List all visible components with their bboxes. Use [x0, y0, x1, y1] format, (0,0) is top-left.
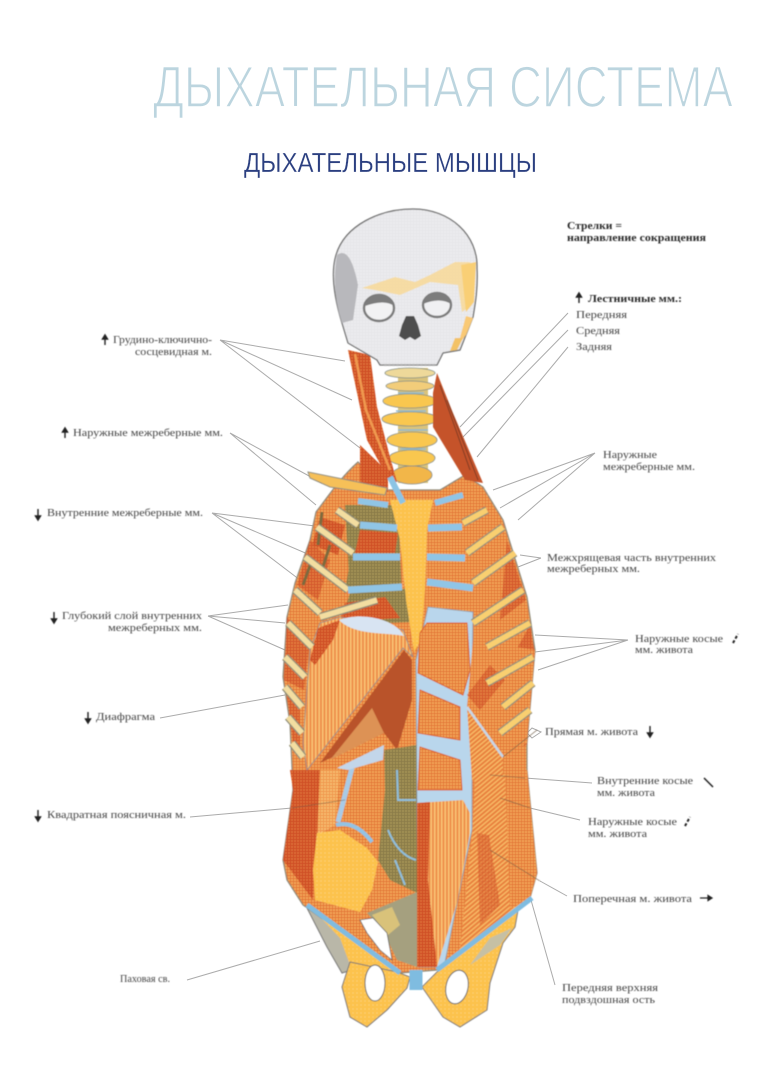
label: internal intercostals: Внутренние межреберные мм. — [47, 508, 203, 519]
skull — [333, 209, 477, 365]
label: internal obliques — [597, 776, 713, 799]
label: intercartilaginous part — [547, 553, 716, 575]
label: quadratus lumborum: Квадратная поясничная м. — [47, 810, 186, 821]
label: external intercostals left: Наружные межреберные мм. — [73, 428, 223, 439]
lateral red shading — [284, 540, 535, 760]
leader lines — [160, 313, 628, 985]
rectus segment 1 — [418, 623, 470, 695]
ribs left — [285, 510, 377, 757]
label: innermost intercostals: Глубокий слой внутренних — [62, 611, 202, 622]
label: external intercostals right — [603, 450, 695, 473]
label: innermost intercostals — [52, 611, 202, 634]
neck vertebrae — [382, 368, 438, 484]
rectus segment 4 — [417, 800, 470, 967]
label: anterior superior iliac spine: подвздошная ость — [562, 995, 656, 1006]
pelvis bones — [307, 908, 518, 1027]
label: anterior superior iliac spine: Передняя верхняя — [562, 983, 658, 994]
left chest interior — [303, 505, 413, 625]
rectus segment 2 — [418, 690, 460, 740]
scalene muscles — [433, 373, 483, 483]
torso base muscles — [283, 462, 537, 973]
label: external obliques upper: Наружные косые — [635, 634, 724, 645]
label: external intercostals right: межреберные мм. — [603, 462, 695, 473]
costal cartilages — [348, 495, 473, 590]
label: scalenes: Передняя — [576, 310, 627, 321]
right obliques — [460, 640, 537, 950]
clavicle — [308, 472, 387, 495]
label: scalenes: Лестничные мм.: — [588, 294, 682, 305]
label: scalenes — [576, 293, 682, 353]
label: external obliques upper — [635, 634, 738, 656]
subtitle: ДЫХАТЕЛЬНЫЕ МЫШЦЫ — [244, 147, 537, 178]
label: innermost intercostals: межреберных мм. — [108, 623, 202, 634]
ribs right — [463, 510, 533, 733]
diaphragm — [303, 617, 413, 770]
label: external obliques lower — [588, 817, 690, 840]
label: internal obliques: мм. живота — [597, 788, 656, 799]
rectus abdominis sheath — [416, 607, 473, 967]
sternum — [390, 500, 433, 652]
label: diaphragm: Диафрагма — [96, 712, 156, 723]
label: rectus abdominis — [545, 726, 652, 738]
legend: arrows: Стрелки = — [567, 221, 622, 232]
rectus segment 3 — [418, 747, 462, 790]
lower left muscles and iliac crest — [283, 745, 384, 912]
label: rectus abdominis: Прямая м. живота — [545, 727, 639, 738]
label: internal obliques: Внутренние косые — [597, 776, 694, 787]
label: transversus abdominis — [573, 894, 712, 905]
legend: arrows — [567, 221, 707, 244]
label: transversus abdominis: Поперечная м. живота — [573, 894, 693, 905]
label: sternocleidomastoid — [102, 335, 212, 358]
label: intercartilaginous part: межреберных мм. — [547, 564, 640, 575]
label: anterior superior iliac spine — [562, 983, 658, 1006]
sternocleidomastoid — [348, 350, 403, 503]
label: scalenes: Задняя — [576, 342, 612, 353]
label: sternocleidomastoid: сосцевидная м. — [135, 347, 212, 358]
label: sternocleidomastoid: Грудино-ключично- — [113, 335, 212, 346]
inguinal ligaments — [307, 898, 532, 990]
label: inguinal ligament: Паховая св. — [120, 974, 170, 985]
labels — [36, 221, 738, 1006]
label: external obliques lower: мм. живота — [588, 829, 648, 840]
anatomical figure — [283, 209, 540, 1027]
label: intercartilaginous part: Межхрящевая часть внутренних — [547, 553, 716, 564]
label: diaphragm — [86, 712, 156, 723]
internal pointer lines — [292, 730, 540, 881]
legend: arrows: направление сокращения — [567, 233, 707, 244]
label: external obliques lower: Наружные косые — [588, 817, 678, 828]
spine and sacrum — [360, 745, 417, 967]
label: scalenes: Средняя — [576, 326, 620, 337]
label: external intercostals right: Наружные — [603, 450, 658, 461]
label: external obliques upper: мм. живота — [635, 645, 694, 656]
